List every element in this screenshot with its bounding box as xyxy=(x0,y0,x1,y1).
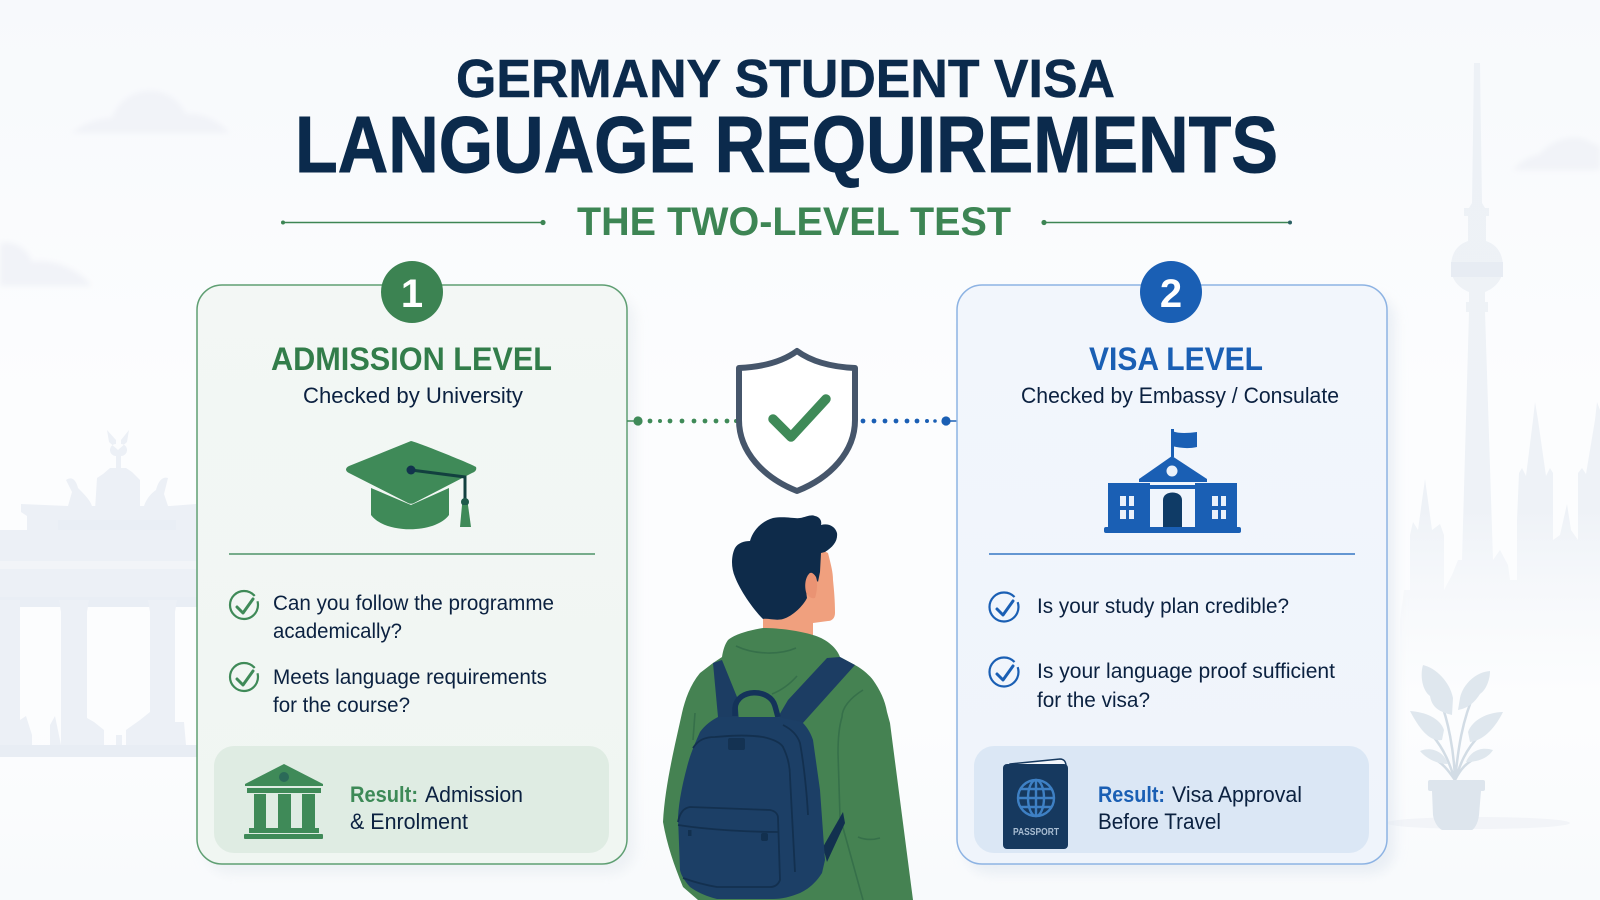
connector: blue dotted line xyxy=(861,416,957,426)
result text xyxy=(350,782,523,834)
connector: green dotted line xyxy=(627,416,738,426)
question 1: academically? xyxy=(273,619,402,643)
checklist: admission xyxy=(230,591,554,717)
backpack lower strap xyxy=(823,812,845,862)
icon: graduation cap xyxy=(346,441,476,529)
panel: visa level xyxy=(957,261,1395,874)
question 2: Is your language proof sufficient xyxy=(1037,659,1335,683)
backpack body xyxy=(678,717,825,899)
neck and face xyxy=(763,550,835,642)
question 2: Meets language requirements xyxy=(273,665,547,689)
title: line one: GERMANY STUDENT VISA xyxy=(456,49,1115,109)
result text: Result: xyxy=(350,782,418,807)
checked by embassy: Checked by Embassy / Consulate xyxy=(1021,383,1339,408)
subtitle with rules: THE TWO-LEVEL TEST xyxy=(577,200,1011,244)
result box: admission xyxy=(214,746,609,853)
result text: Before Travel xyxy=(1098,809,1221,834)
backpack details xyxy=(678,725,808,887)
result text: & Enrolment xyxy=(350,809,468,834)
check item 1 xyxy=(990,592,1018,622)
background: potted plant xyxy=(1386,665,1570,830)
check item 2 xyxy=(230,663,258,691)
hair xyxy=(732,515,837,620)
badge 2: 2 xyxy=(1160,272,1182,316)
background: clouds xyxy=(0,91,1600,286)
question 1: Is your study plan credible? xyxy=(1037,594,1289,618)
question 2 xyxy=(273,665,547,717)
backpack handle xyxy=(735,693,778,717)
heading: admission level: ADMISSION LEVEL xyxy=(271,341,552,377)
check item 2 xyxy=(990,658,1018,686)
icon: university building xyxy=(244,764,323,839)
heading: visa level: VISA LEVEL xyxy=(1089,341,1263,377)
result text: Visa Approval xyxy=(1172,782,1302,807)
icon: passport: PASSPORT xyxy=(1013,826,1059,838)
question 2: for the visa? xyxy=(1037,688,1150,712)
question 2 xyxy=(1037,659,1335,712)
icon: passport xyxy=(1003,759,1068,849)
icon: shield with check xyxy=(739,351,855,491)
checked by university: Checked by University xyxy=(303,383,523,408)
subtitle with rules xyxy=(281,200,1292,244)
badge 1: 1 xyxy=(401,272,423,316)
result box: visa xyxy=(974,746,1369,853)
ear xyxy=(805,573,817,598)
question 1 xyxy=(273,591,554,643)
hoodie xyxy=(663,628,913,900)
question 2: for the course? xyxy=(273,693,410,717)
title: line two: LANGUAGE REQUIREMENTS xyxy=(295,100,1278,189)
icon: embassy building xyxy=(1104,429,1241,533)
question 1: Can you follow the programme xyxy=(273,591,554,615)
panel: admission level xyxy=(197,261,635,874)
background: TV tower and skyline xyxy=(1400,63,1600,700)
student illustration xyxy=(663,515,913,900)
background: Brandenburg gate silhouette xyxy=(0,430,197,757)
badge 2 xyxy=(1140,261,1202,323)
result text: Admission xyxy=(425,782,523,807)
result text: Result: xyxy=(1098,782,1165,807)
result text xyxy=(1098,782,1302,834)
check item 1 xyxy=(230,591,258,619)
badge 1 xyxy=(381,261,443,323)
backpack straps xyxy=(713,660,739,722)
hoodie folds xyxy=(693,646,880,900)
checklist: visa xyxy=(990,592,1335,712)
